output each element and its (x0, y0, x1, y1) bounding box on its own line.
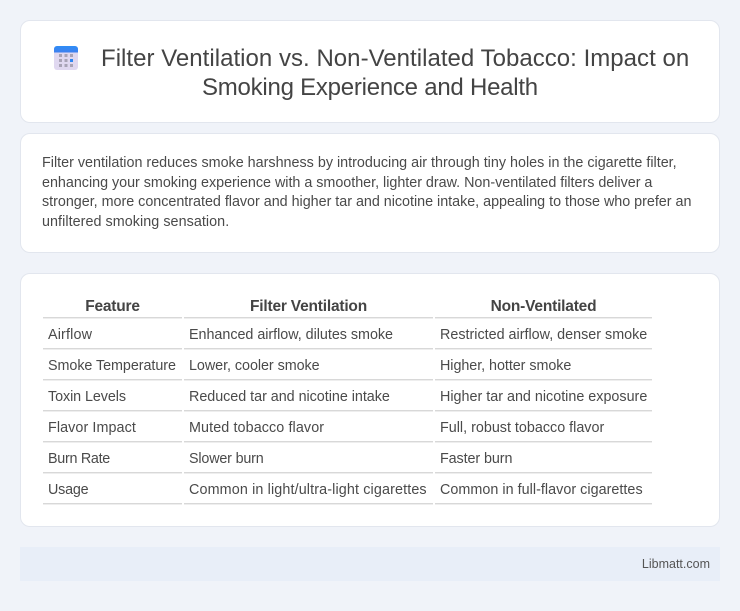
intro paragraph (42, 155, 691, 230)
comparison table: Faster burn (440, 451, 512, 467)
row: Smoke Temperature: Smoke Temperature (48, 358, 176, 374)
intro paragraph: Filter ventilation reduces smoke harshness by introducing air through tiny holes in the cigarette filter, (42, 155, 677, 171)
row: Flavor Impact: Flavor Impact (48, 420, 136, 436)
header: Feature: Feature (85, 298, 140, 315)
intro paragraph: stronger, more concentrated flavor and higher tar and nicotine intake, appealing to those who prefer an (42, 194, 691, 210)
comparison table: Higher tar and nicotine exposure (440, 389, 647, 405)
title: Smoking Experience and Health (202, 74, 538, 101)
comparison table: Reduced tar and nicotine intake (189, 389, 390, 405)
footer credit: Libmatt.com (642, 557, 710, 571)
row: Airflow: Airflow (48, 327, 92, 343)
icon: calendar (54, 46, 78, 70)
comparison table (43, 298, 652, 505)
title: Filter Ventilation vs. Non-Ventilated Tobacco: Impact on (101, 45, 689, 72)
title (101, 45, 689, 101)
row: Burn Rate: Burn Rate (48, 451, 110, 467)
title card (20, 20, 720, 123)
footer bar (20, 547, 720, 581)
table card (20, 273, 720, 527)
header: Non-Ventilated: Non-Ventilated (491, 298, 596, 315)
intro paragraph: enhancing your smoking experience with a smoother, lighter draw. Non-ventilated filters deliver a (42, 174, 652, 190)
header: Filter Ventilation: Filter Ventilation (250, 298, 367, 315)
comparison table: Full, robust tobacco flavor (440, 420, 604, 436)
comparison table: Muted tobacco flavor (189, 420, 324, 436)
intro text card (20, 133, 720, 253)
comparison table: Restricted airflow, denser smoke (440, 327, 647, 343)
comparison table: Higher, hotter smoke (440, 358, 571, 374)
comparison table: Common in light/ultra-light cigarettes (189, 482, 427, 498)
comparison table: Lower, cooler smoke (189, 358, 320, 374)
row: Usage: Usage (48, 482, 88, 498)
intro paragraph: unfiltered smoking sensation. (42, 214, 229, 230)
comparison table: Common in full-flavor cigarettes (440, 482, 643, 498)
row: Toxin Levels: Toxin Levels (48, 389, 126, 405)
comparison table: Slower burn (189, 451, 264, 467)
comparison table: Enhanced airflow, dilutes smoke (189, 327, 393, 343)
